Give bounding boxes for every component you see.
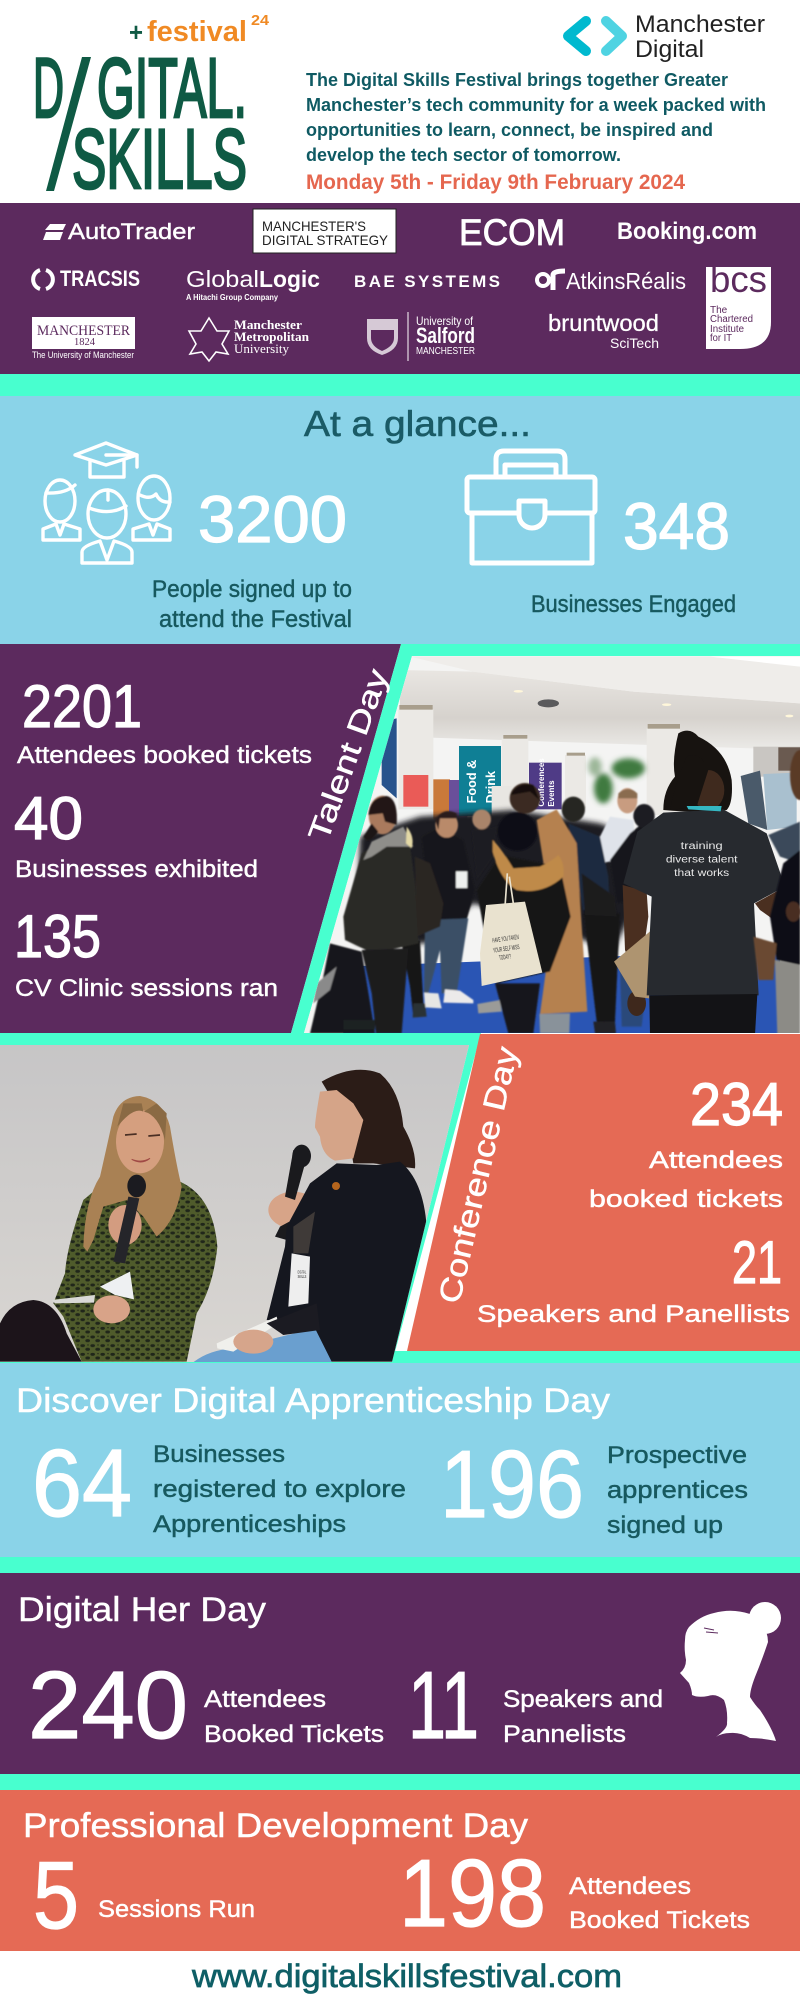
photo: crowd at talent day: [300, 650, 800, 1037]
stat: 21 speakers: [477, 1229, 790, 1328]
heading: conference day: Conference Day: [432, 1043, 525, 1307]
Manchester Digital logo: Manchester: [635, 11, 765, 38]
stat: 21 speakers: 21: [732, 1229, 782, 1296]
intro text: [306, 70, 766, 165]
header: [33, 11, 766, 206]
stat: 40 businesses: 40: [14, 785, 83, 852]
logo: ECOM: ECOM: [459, 212, 565, 253]
logo: University of Salford: University of: [416, 314, 474, 328]
photo detail: man in puffer jacket: [415, 857, 443, 937]
logo: Booking.com: Booking.com: [617, 218, 757, 245]
stat: 198 attendees: Booked Tickets: [569, 1907, 750, 1934]
stat: 64 businesses: Businesses: [153, 1441, 285, 1468]
heading: Discover Digital Apprenticeship Day: [16, 1382, 610, 1420]
logo: BCS: The: [710, 305, 728, 316]
stat: 21 speakers: Speakers and Panellists: [477, 1301, 790, 1328]
stat: 2201 attendees: Attendees booked tickets: [17, 742, 312, 769]
logo: Manchester's Digital Strategy: MANCHESTER'S: [262, 218, 366, 234]
caption: people signed up: People signed up to: [152, 576, 352, 603]
logo: AutoTrader: AutoTrader: [68, 219, 195, 244]
stat: 5 sessions: Sessions Run: [98, 1896, 255, 1923]
stat: 198 attendees: 198: [399, 1840, 546, 1947]
logo: Manchester Metropolitan University: Manchester: [234, 318, 302, 332]
photo detail: right speaker: DIGITAL: [298, 1269, 307, 1274]
logo: Tracsis: TRACSIS: [60, 266, 140, 291]
photo detail: banners: Events: [547, 780, 556, 807]
stat: 196 apprentices: Prospective: [607, 1442, 747, 1469]
intro text: Manchester’s tech community for a week packed with: [306, 95, 766, 115]
photo detail: floor: [343, 950, 780, 1037]
stat: 3200: 3200: [198, 482, 347, 556]
panel: talent day: [0, 644, 800, 1037]
logo: University of Salford: Salford: [416, 323, 475, 348]
photo detail: right speaker: [190, 1070, 427, 1365]
stat: 11 speakers: Pannelists: [503, 1721, 626, 1748]
stat: 240 attendees: Attendees: [204, 1686, 326, 1713]
stat: 64 businesses: registered to explore: [153, 1476, 406, 1503]
logo: University of Manchester: [32, 317, 135, 360]
stat: 64 businesses: Apprenticeships: [153, 1511, 346, 1538]
stat: 5 sessions: [33, 1842, 255, 1949]
logo: AtkinsRéalis: AtkinsRéalis: [566, 268, 686, 294]
stat: 2201 attendees: [17, 673, 312, 769]
photo detail: plant: [588, 757, 645, 803]
panel: discover digital apprenticeship day: [0, 1363, 800, 1557]
photo detail: people at right edge: [753, 750, 800, 1035]
icon: briefcase: [467, 451, 595, 563]
stat: 234 attendees: Attendees: [649, 1147, 783, 1174]
stat: 240 attendees: Booked Tickets: [204, 1721, 384, 1748]
stat: 135 CV clinics: 135: [14, 903, 101, 970]
festival logo: SKILLS: [72, 112, 247, 206]
photo detail: banners: Conferences: [537, 758, 546, 807]
stat: 234 attendees: 234: [690, 1071, 783, 1138]
stat: 196 apprentices: signed up: [607, 1512, 723, 1539]
logo: GlobalLogic: [186, 266, 320, 302]
photo detail: man in black jacket: [422, 827, 475, 920]
event dates: Monday 5th - Friday 9th February 2024: [306, 171, 685, 194]
photo detail: man in t-shirt from behind: diverse talent: [666, 855, 738, 866]
intro text: opportunities to learn, connect, be inspired and: [306, 120, 713, 140]
caption: people signed up: attend the Festival: [159, 606, 352, 633]
heading: Digital Her Day: [18, 1591, 266, 1629]
photo: two speakers with microphones: [0, 1040, 480, 1365]
logo: BCS: [706, 259, 771, 349]
panel: professional development day: [0, 1790, 800, 1951]
stat: 196 apprentices: [440, 1431, 748, 1539]
logo: BAE Systems: BAE SYSTEMS: [354, 272, 500, 291]
panel: at a glance: [0, 396, 800, 644]
photo detail: tote bag: TODAY?: [499, 953, 512, 962]
mint band under talent day: [0, 1033, 481, 1363]
photo detail: man in camel coat: [510, 783, 540, 814]
logo: Manchester's Digital Strategy: [253, 209, 396, 253]
stat: 198 attendees: Attendees: [569, 1873, 691, 1900]
icon: woman silhouette: [680, 1602, 781, 1741]
stat: 135 CV clinics: CV Clinic sessions ran: [15, 975, 278, 1002]
icon: graduates: [43, 443, 170, 563]
stat: 11 speakers: 11: [408, 1652, 479, 1759]
stat: 5 sessions: 5: [33, 1842, 79, 1949]
photo detail: banners: Food &: [465, 760, 479, 803]
Manchester Digital logo: [568, 11, 765, 63]
stat: 196 apprentices: apprentices: [607, 1477, 748, 1504]
logo: Bruntwood SciTech: bruntwood: [548, 310, 659, 336]
logo: BCS: Chartered: [710, 314, 753, 325]
stat: 11 speakers: [408, 1652, 663, 1759]
stat: 240 attendees: [28, 1652, 384, 1759]
logo: Manchester's Digital Strategy: DIGITAL STRATEGY: [262, 232, 389, 248]
stat: 40 businesses: [14, 785, 258, 883]
stat: 64 businesses: [32, 1430, 406, 1538]
festival logo: 24: [251, 12, 270, 29]
photo detail: man in t-shirt from behind: that works: [674, 868, 729, 879]
stat: 196 apprentices: 196: [440, 1431, 584, 1538]
photo detail: man in t-shirt from behind: [614, 731, 790, 1035]
intro text: develop the tech sector of tomorrow.: [306, 145, 621, 165]
logo: GlobalLogic: Logic: [259, 266, 320, 292]
logo: Manchester Metropolitan University: University: [234, 342, 290, 356]
photo detail: tote bag: YOUR SELF MISS: [493, 944, 520, 955]
logo: BCS: for IT: [710, 333, 732, 344]
logo: BCS: Institute: [710, 324, 744, 335]
mint band: [0, 1557, 800, 1573]
stat: 64 businesses: 64: [32, 1430, 132, 1537]
photo detail: woman with fur hood: [477, 855, 571, 983]
logo: University of Manchester: The University of Manchester: [32, 350, 134, 360]
stat: 11 speakers: Speakers and: [503, 1686, 663, 1713]
panel: sponsor logos: [0, 203, 800, 374]
festival logo: +: [129, 17, 143, 47]
logo: Bruntwood SciTech: [548, 310, 659, 351]
intro text: The Digital Skills Festival brings together Greater: [306, 70, 728, 90]
logo: BCS: bcs: [710, 259, 767, 300]
photo detail: left speaker: [0, 1096, 217, 1362]
stat: 40 businesses: Businesses exhibited: [15, 856, 258, 883]
caption: people signed up: [152, 576, 352, 633]
stat: 135 CV clinics: [14, 903, 278, 1002]
heading: At a glance...: [304, 403, 531, 444]
panel: digital her day: [0, 1573, 800, 1774]
logo: Tracsis: [33, 266, 140, 291]
panel: conference day: [0, 1034, 800, 1365]
logo: University of Manchester: 1824: [74, 336, 95, 348]
photo detail: crowd backdrop: [357, 810, 633, 950]
caption: businesses engaged: Businesses Engaged: [531, 591, 736, 618]
festival logo: festival: [147, 16, 247, 48]
heading: Professional Development Day: [23, 1807, 528, 1845]
website url: www.digitalskillsfestival.com: [191, 1958, 622, 1994]
logo: Manchester Metropolitan University: Metropolitan: [234, 330, 309, 344]
logo: Bruntwood SciTech: SciTech: [610, 335, 659, 351]
mint band: [0, 1774, 800, 1790]
stat: 2201 attendees: 2201: [22, 673, 142, 740]
logo: University of Manchester: MANCHESTER: [37, 323, 130, 339]
festival logo: GITAL.: [97, 41, 247, 135]
stat: 234 attendees: [589, 1071, 783, 1213]
logo: GlobalLogic: Global: [186, 266, 259, 292]
photo detail: right speaker: SKILLS: [298, 1274, 306, 1279]
mint band: [0, 374, 800, 396]
photo detail: banners: Drink: [484, 770, 498, 803]
photo detail: pillars: [398, 705, 680, 815]
logo: University of Salford: [367, 312, 475, 361]
photo detail: banners: [382, 718, 797, 830]
photo detail: tote bag: [480, 873, 542, 986]
photo detail: tote bag: HAVE YOU TAKEN: [492, 934, 519, 945]
festival logo: D: [33, 41, 64, 135]
photo detail: man in t-shirt from behind: training: [681, 841, 723, 852]
logo: GlobalLogic: A Hitachi Group Company: [186, 293, 279, 302]
stat: 240 attendees: 240: [28, 1652, 188, 1759]
photo detail: background people: [600, 817, 637, 863]
stat: 234 attendees: booked tickets: [589, 1186, 783, 1213]
Manchester Digital logo: Digital: [635, 36, 704, 63]
festival logo: [33, 12, 270, 206]
logo: University of Salford: MANCHESTER: [416, 346, 475, 357]
heading: talent day: Talent Day: [303, 665, 395, 845]
logo: Manchester Metropolitan University: [189, 318, 309, 361]
stat: 348: 348: [623, 489, 730, 563]
stat: 198 attendees: [399, 1840, 750, 1947]
